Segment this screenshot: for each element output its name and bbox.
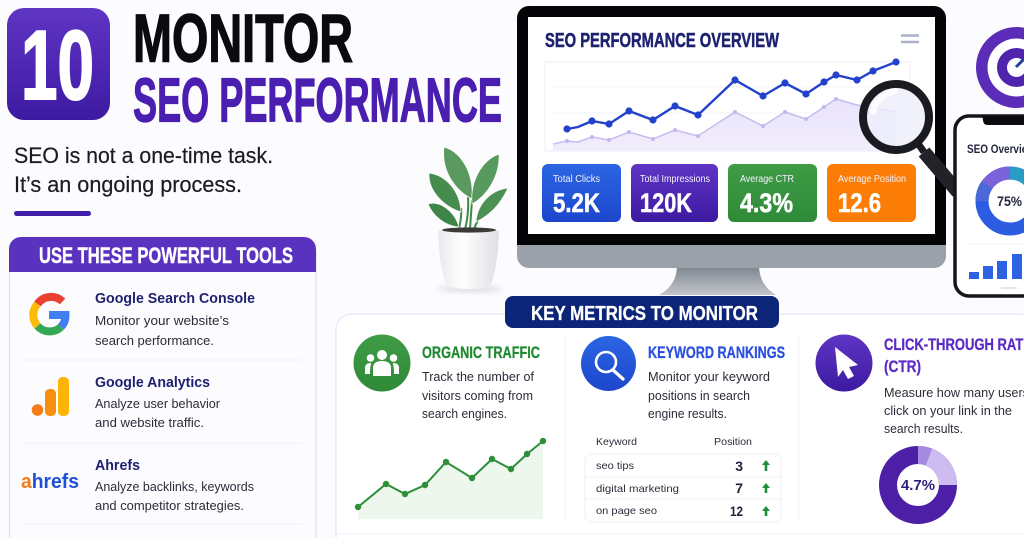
monitor stand <box>659 267 776 295</box>
menu icon <box>901 36 919 42</box>
tool: ahrefs: and competitor strategies. <box>95 499 244 513</box>
dashboard heading: SEO PERFORMANCE OVERVIEW <box>545 30 779 52</box>
keyword table: 7 <box>735 480 743 496</box>
tools heading: USE THESE POWERFUL TOOLS <box>39 243 293 268</box>
metric: keyword rankings: KEYWORD RANKINGS <box>648 343 785 362</box>
panel: key metrics <box>336 296 1024 538</box>
key metrics heading <box>505 296 779 328</box>
smartphone <box>955 116 1024 296</box>
stat card: total impressions: 120K <box>640 188 692 218</box>
tool: google search console: Monitor your website’s <box>95 314 229 328</box>
tool: google search console: Google Search Console <box>95 291 255 307</box>
phone bar chart <box>969 254 1022 279</box>
stat card: total impressions <box>631 164 718 222</box>
metric: click-through rate: click on your link in the <box>884 404 1012 418</box>
stat card: average position: 12.6 <box>838 188 881 218</box>
metric: keyword rankings: engine results. <box>648 407 727 421</box>
keyword table: digital marketing <box>596 483 679 495</box>
icon: google analytics <box>32 377 69 416</box>
ctr donut chart: 4.7% <box>901 477 935 494</box>
metric: click-through rate: Measure how many users <box>884 386 1024 400</box>
tool: google search console <box>95 291 255 348</box>
metric: keyword rankings: positions in search <box>648 389 750 403</box>
metric: organic traffic: Track the number of <box>422 370 535 384</box>
keyword table: on page seo <box>596 505 657 517</box>
tool: ahrefs: Analyze backlinks, keywords <box>95 480 254 494</box>
stat card: average ctr: 4.3% <box>740 188 793 218</box>
tool: google analytics <box>95 375 220 430</box>
title <box>133 0 502 136</box>
stat card: average ctr <box>728 164 817 222</box>
icon: potted plant <box>428 147 508 292</box>
keyword table: seo tips <box>596 460 634 472</box>
tool: ahrefs: Ahrefs <box>95 458 140 474</box>
metric: organic traffic: visitors coming from <box>422 389 533 403</box>
icon: target <box>976 27 1024 108</box>
tool: google search console: search performance. <box>95 334 214 348</box>
line chart <box>545 58 910 151</box>
key metrics heading: KEY METRICS TO MONITOR <box>531 302 758 325</box>
subtitle text <box>14 143 273 197</box>
stat card: average ctr: Average CTR <box>740 174 794 185</box>
stat card: average position <box>827 164 916 222</box>
tool: google analytics: Analyze user behavior <box>95 397 220 411</box>
icon: search <box>581 336 636 391</box>
icon: users <box>354 334 410 392</box>
icon: google <box>33 297 66 331</box>
metric: organic traffic: ORGANIC TRAFFIC <box>422 343 540 362</box>
keyword table: 3 <box>735 458 743 474</box>
keyword table: Keyword <box>596 436 637 448</box>
stat card: total impressions: Total Impressions <box>640 174 710 185</box>
tool: ahrefs <box>95 458 254 513</box>
keyword table <box>585 436 781 522</box>
keyword table: 12 <box>730 503 743 519</box>
desktop monitor <box>517 6 946 295</box>
panel: tools <box>9 237 316 538</box>
stat card: total clicks: Total Clicks <box>553 174 600 185</box>
metric: click-through rate <box>884 335 1024 436</box>
metric: click-through rate: search results. <box>884 422 963 436</box>
keyword table: Position <box>714 436 752 448</box>
metric: keyword rankings: Monitor your keyword <box>648 370 770 384</box>
phone notch <box>982 116 1024 125</box>
ctr donut chart <box>888 455 948 515</box>
title: MONITOR <box>133 0 353 76</box>
accent bar <box>14 211 91 216</box>
stat card: total clicks <box>542 164 621 222</box>
title: SEO PERFORMANCE <box>133 66 502 136</box>
tools heading <box>9 237 316 272</box>
tool: google analytics: and website traffic. <box>95 416 204 430</box>
metric: organic traffic: search engines. <box>422 407 507 421</box>
organic traffic chart <box>355 438 546 519</box>
metric: keyword rankings <box>648 343 785 421</box>
stat card: total clicks: 5.2K <box>553 188 600 218</box>
metric: click-through rate: (CTR) <box>884 357 921 376</box>
metric: organic traffic <box>422 343 540 421</box>
icon: magnifying glass <box>863 84 958 192</box>
number badge: 10 <box>21 10 94 120</box>
icon: ahrefs logo: ahrefs <box>21 470 79 493</box>
subtitle text: It’s an ongoing process. <box>14 172 242 197</box>
icon: cursor <box>816 334 872 392</box>
tool: google analytics: Google Analytics <box>95 375 210 391</box>
phone donut chart <box>982 173 1024 229</box>
stat card: average position: Average Position <box>838 174 906 185</box>
subtitle text: SEO is not a one-time task. <box>14 143 273 168</box>
